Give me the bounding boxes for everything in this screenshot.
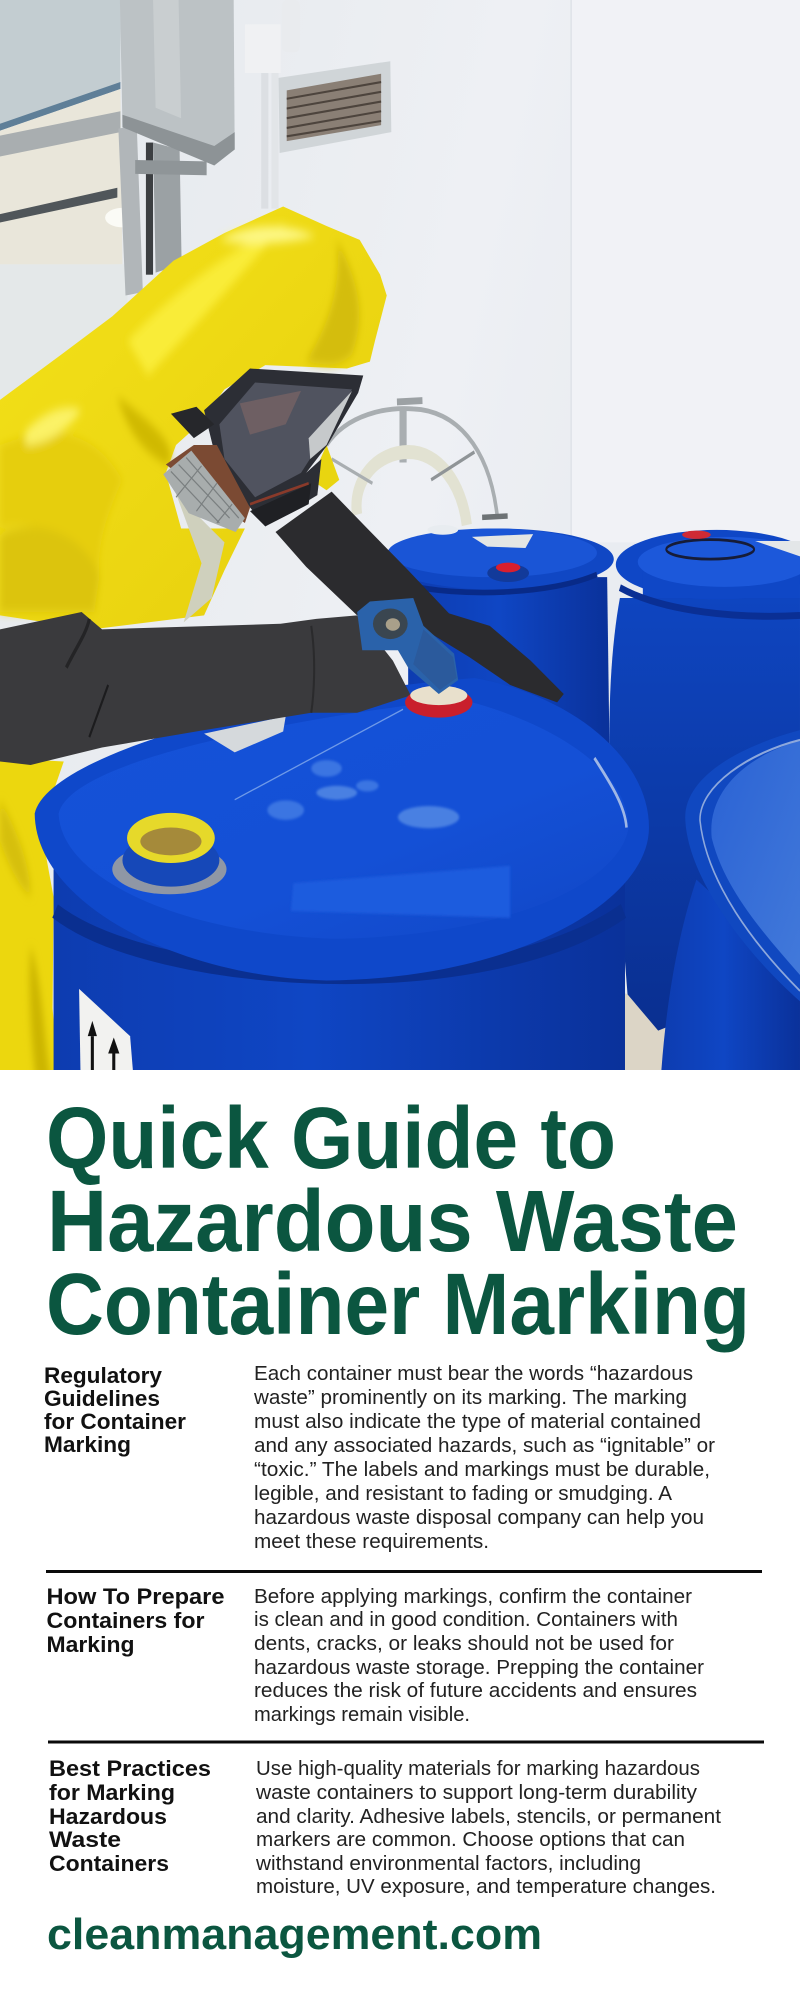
body text: best practices: Use high-quality materials for marking hazardous	[256, 1758, 700, 1780]
heading: best practices: Best Practices	[49, 1756, 211, 1781]
section: regulatory guidelines	[44, 1363, 715, 1553]
body text: regulatory guidelines: Each container must bear the words “hazardous	[254, 1363, 693, 1385]
title: Quick Guide to	[46, 1090, 616, 1187]
heading: regulatory guidelines: for Container	[44, 1409, 186, 1434]
yellow bung cap	[112, 813, 227, 894]
body text: regulatory guidelines: waste” prominently on its marking. The marking	[253, 1387, 687, 1409]
heading: how to prepare: How To Prepare	[46, 1584, 224, 1609]
heading: best practices: for Marking	[49, 1780, 175, 1805]
heading: best practices	[49, 1756, 211, 1876]
red bung cap	[405, 686, 472, 718]
hose reel on wall	[327, 401, 508, 525]
photo: worker in yellow hazmat suit with blue barrels	[0, 0, 800, 1080]
lower arm glove	[0, 612, 411, 765]
body text: best practices: and clarity. Adhesive labels, stencils, or permanent	[256, 1806, 721, 1828]
heading: best practices: Hazardous	[49, 1804, 167, 1829]
filter cartridge	[163, 451, 245, 532]
body text: how to prepare: Before applying markings, confirm the container	[254, 1586, 692, 1608]
blue pump tool	[357, 598, 458, 694]
body text: best practices	[255, 1758, 721, 1898]
title: Container Marking	[46, 1256, 750, 1353]
body text: best practices: moisture, UV exposure, and temperature changes.	[256, 1876, 716, 1898]
body text: how to prepare: markings remain visible.	[254, 1704, 470, 1726]
body text: how to prepare: hazardous waste storage. Prepping the container	[254, 1657, 704, 1679]
label with arrows	[79, 989, 133, 1070]
heading: regulatory guidelines: Regulatory	[44, 1363, 163, 1388]
clear hood edge	[176, 494, 224, 622]
barrel: main front	[35, 678, 649, 1080]
body text: best practices: markers are common. Choose options that can	[256, 1829, 685, 1851]
heading: regulatory guidelines: Marking	[44, 1432, 131, 1457]
body text: regulatory guidelines: meet these requirements.	[254, 1531, 489, 1553]
body text: best practices: withstand environmental factors, including	[255, 1853, 641, 1875]
floor	[625, 993, 666, 1070]
body text: how to prepare: is clean and in good condition. Containers with	[254, 1609, 678, 1631]
wall vent	[279, 61, 391, 153]
body text: best practices: waste containers to support long-term durability	[255, 1782, 697, 1804]
heading: how to prepare	[46, 1584, 224, 1657]
heading: best practices: Containers	[49, 1851, 169, 1876]
barrel: back centre	[388, 528, 614, 744]
body text: regulatory guidelines: must also indicate the type of material contained	[254, 1411, 701, 1433]
body text: regulatory guidelines: and any associated hazards, such as “ignitable” or	[254, 1435, 715, 1457]
water droplets on lid	[267, 760, 510, 918]
wall conduit pipes	[262, 73, 278, 208]
heading: regulatory guidelines	[44, 1363, 186, 1457]
wall background	[0, 0, 800, 1080]
heading: regulatory guidelines: Guidelines	[44, 1386, 160, 1411]
body text: regulatory guidelines: hazardous waste disposal company can help you	[254, 1507, 704, 1529]
metal duct and columns	[118, 0, 235, 296]
body text: how to prepare: reduces the risk of future accidents and ensures	[254, 1680, 697, 1702]
raised arm glove	[276, 492, 564, 702]
body text: how to prepare: dents, cracks, or leaks should not be used for	[254, 1633, 674, 1655]
barrel: front right	[661, 730, 800, 1080]
section: how to prepare	[46, 1584, 704, 1726]
heading: best practices: Waste	[49, 1827, 121, 1852]
footer website: cleanmanagement.com	[47, 1910, 542, 1959]
title: Hazardous Waste	[47, 1173, 738, 1270]
hazmat suit	[0, 207, 387, 1080]
paper under arm	[204, 716, 286, 752]
body text: regulatory guidelines: “toxic.” The labels and markings must be durable,	[254, 1459, 710, 1481]
body text: regulatory guidelines: legible, and resistant to fading or smudging. A	[254, 1483, 673, 1505]
body text: regulatory guidelines	[253, 1363, 715, 1553]
body text: how to prepare	[254, 1586, 704, 1726]
ceiling and corridor	[0, 0, 122, 264]
suit shading folds	[0, 223, 359, 1080]
respirator mask	[163, 369, 363, 532]
title	[46, 1090, 750, 1353]
heading: how to prepare: Containers for	[46, 1608, 205, 1633]
barrel: back right	[609, 530, 800, 1031]
section: best practices	[49, 1756, 721, 1898]
heading: how to prepare: Marking	[46, 1632, 134, 1657]
